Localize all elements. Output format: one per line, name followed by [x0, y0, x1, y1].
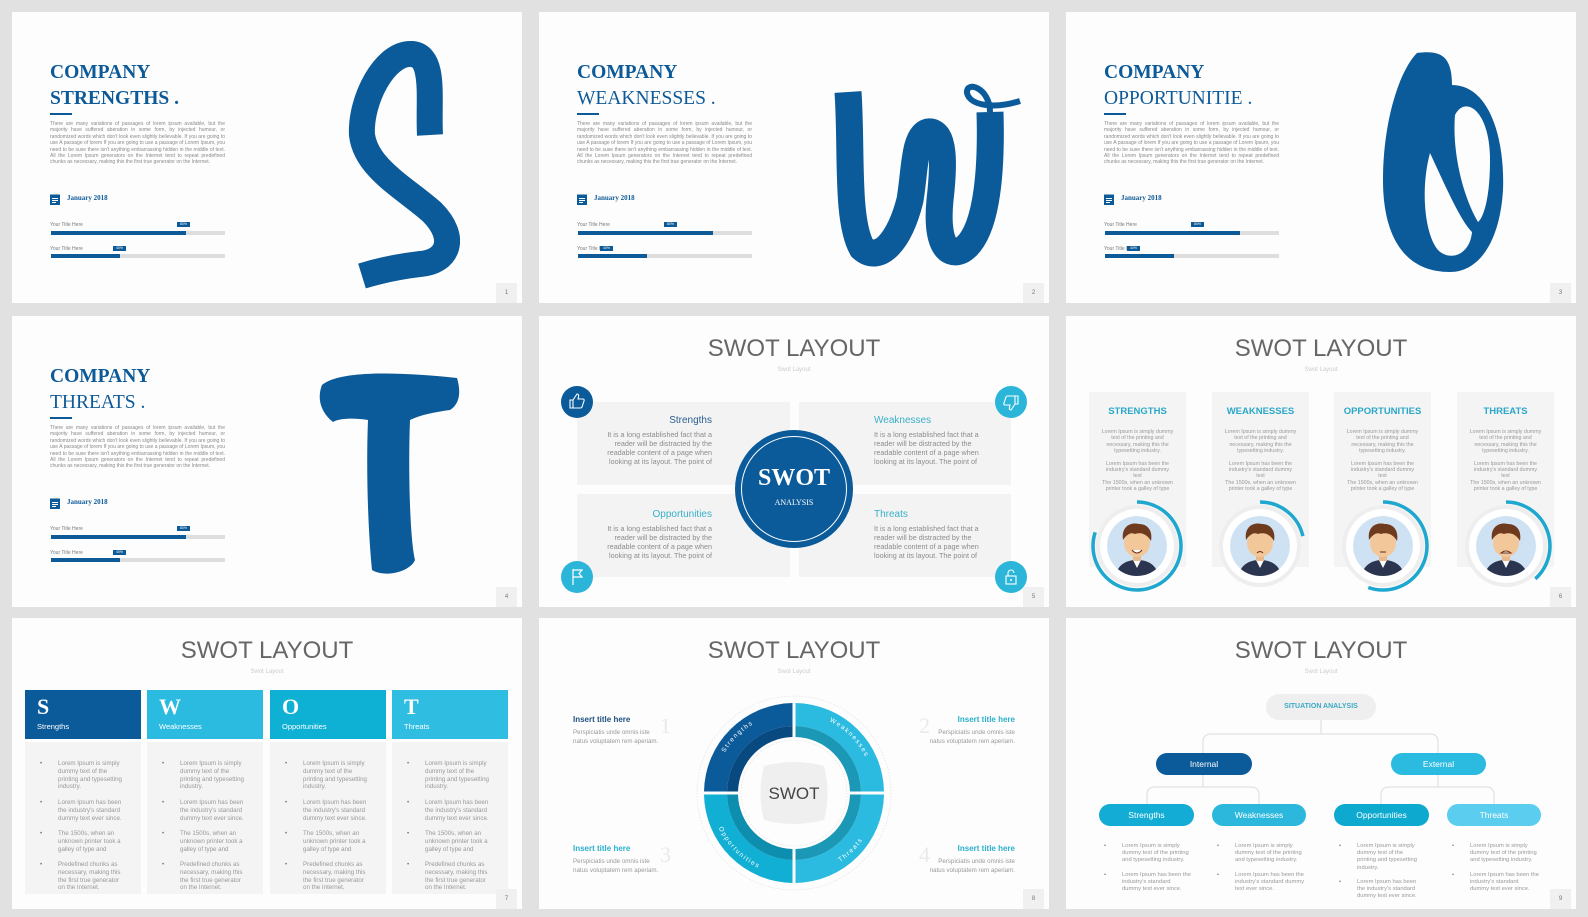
column: weaknesses: typesetting industry. [1237, 448, 1284, 454]
big letter O [1383, 52, 1504, 272]
progress bars: 80% [667, 222, 674, 226]
paragraph: There are many variations of passages of lorem ipsum available, but the majority have suffered aberation in some form, by injected humour, or randomized words which don't look even slightly believable. If you are going to use A passage of lorem If you are going to use a passage of Lorem Ipsum, you need to be suse there isn't anything embarrassing hidden in the middle of text. All the Lorem Ipsum generators on the Internet tend to repeat predefined chunks as necessary, making this the first true generator on the Internet. [50, 425, 225, 469]
slide 9: situation analysis tree: Lorem Ipsum has been the [1122, 872, 1191, 878]
title [50, 366, 150, 413]
node: weaknesses: Weaknesses [1235, 810, 1283, 820]
list: strengths: Predefined chunks as [58, 861, 118, 868]
node: strengths [1099, 804, 1194, 826]
progress bars: 80% [180, 222, 187, 226]
list: opportunities: The 1500s, when an [303, 830, 359, 837]
list: opportunities: Predefined chunks as [303, 861, 363, 868]
list: strengths: dummy text of the printing [1122, 850, 1189, 856]
heading: SWOT LAYOUT [1235, 335, 1407, 362]
panel: weaknesses: Weaknesses [874, 415, 931, 426]
node: situation analysis: SITUATION ANALYSIS [1284, 703, 1358, 710]
list: threats: and typesetting industry. [1470, 857, 1532, 863]
panel: strengths: reader will be distracted by the [615, 439, 712, 448]
ring chart: Opportunities [719, 826, 759, 868]
list: weaknesses [1235, 843, 1310, 865]
text block 3: natus voluptatem rem aperiam. [573, 866, 658, 874]
column: weaknesses: necessary, making this the [1229, 442, 1292, 448]
column: threats: The 1500s, when an unknown [1470, 480, 1541, 486]
progress bars: Your Title Here [50, 222, 83, 228]
panel: strengths: Strengths [669, 415, 712, 426]
slide 5: swot analysis quadrants [539, 316, 1049, 607]
column: opportunities: Lorem Ipsum has been the [1351, 461, 1414, 467]
slide 8: swot ring: 8 [1032, 896, 1035, 902]
list: threats: dummy text ever since. [425, 815, 489, 822]
progress bars: 40% [116, 246, 123, 250]
date: January 2018 [1121, 194, 1162, 202]
paragraph: There are many variations of passages of lorem ipsum available, but the majority have suffered aberation in some form, by injected humour, or randomized words which don't look even slightly believable. If you are going to use A passage of lorem If you are going to use a passage of Lorem Ipsum, you need to be suse there isn't anything embarrassing hidden in the middle of text. All the Lorem Ipsum generators on the Internet tend to repeat predefined chunks as necessary, making this the first true generator on the Internet. [50, 121, 225, 165]
list: strengths: the first true generator [58, 877, 119, 884]
panel: threats: looking at its layout. The point of [874, 551, 977, 560]
column: weaknesses: industry's standard dummy [1229, 467, 1292, 473]
slide 2: company weaknesses: 2 [1032, 290, 1035, 296]
column: threats: text of the printing and [1479, 435, 1532, 441]
list: strengths: Lorem Ipsum is simply [1122, 843, 1180, 849]
ring chart: Threats [838, 839, 862, 862]
column: threats: printer took a galley of type [1474, 486, 1537, 492]
paragraph: There are many variations of passages of lorem ipsum available, but the majority have suffered aberation in some form, by injected humour, or randomized words which don't look even slightly believable. If you are going to use A passage of lorem If you are going to use a passage of Lorem Ipsum, you need to be suse there isn't anything embarrassing hidden in the middle of text. All the Lorem Ipsum generators on the Internet tend to repeat predefined chunks as necessary, making this the first true generator on the Internet. [1104, 121, 1279, 165]
list: weaknesses: Lorem Ipsum is simply [180, 760, 242, 767]
date: January 2018 [594, 194, 635, 202]
slide 9: situation analysis tree: industry's standard [1122, 879, 1170, 885]
list: opportunities: the first true generator [303, 877, 364, 884]
column: opportunities: industry's standard dummy [1351, 467, 1414, 473]
column: strengths: Lorem Ipsum has been the [1106, 461, 1169, 467]
column: opportunities: printer took a galley of type [1351, 486, 1414, 492]
column: weaknesses: printer took a galley of type [1229, 486, 1292, 492]
column: weaknesses: WEAKNESSES [1227, 406, 1294, 417]
progress bars: Your Title Here [577, 246, 610, 252]
center circle: SWOT analysis [735, 430, 853, 548]
title: COMPANY [50, 366, 150, 387]
slide 7: swot columns: 7 [505, 896, 508, 902]
slide 9: situation analysis tree: text ever since. [1235, 886, 1274, 892]
list: strengths: Lorem Ipsum is simply [58, 760, 120, 767]
list: opportunities: printing and typesetting [303, 776, 367, 783]
text block 2: natus voluptatem rem aperiam. [930, 738, 1015, 744]
header: O opportunities: O [282, 694, 299, 719]
list: threats: necessary, making this [425, 869, 487, 876]
title [577, 62, 716, 109]
column: weaknesses: text of the printing and [1234, 435, 1287, 441]
list: weaknesses: galley of type and [180, 846, 229, 853]
heading: SWOT LAYOUT [708, 637, 880, 664]
progress bars: Your Title Here [50, 246, 83, 252]
column: strengths: Lorem Ipsum is simply dummy [1102, 429, 1173, 435]
list: threats: Lorem Ipsum is simply [1470, 843, 1528, 849]
progress bars: Your Title Here [50, 550, 83, 556]
column: weaknesses: text [1256, 473, 1265, 479]
column: opportunities: necessary, making this the [1351, 442, 1414, 448]
panel: opportunities: readable content of a page when [607, 542, 712, 551]
progress bars [50, 526, 225, 562]
list: threats: Lorem Ipsum has been [425, 799, 488, 806]
list: opportunities: on the Internet. [303, 884, 345, 891]
date: January 2018 [67, 194, 108, 202]
node: internal [1156, 753, 1252, 775]
icon: calendar [1104, 194, 1114, 205]
progress bars: 40% [116, 550, 123, 554]
node: threats [1447, 804, 1541, 826]
progress bars: Your Title Here [1104, 222, 1137, 228]
column: threats: text [1501, 473, 1510, 479]
text block 2: 2 [919, 713, 930, 738]
slide 9: situation analysis tree [1066, 618, 1576, 909]
panel: opportunities: reader will be distracted by the [615, 533, 712, 542]
text block 2 [919, 713, 1015, 744]
column: strengths [1089, 392, 1186, 567]
progress bars [50, 222, 225, 258]
slide 9: situation analysis tree: Lorem Ipsum has been the [1235, 872, 1304, 878]
slide 5: swot analysis quadrants: Swot Layout [777, 367, 811, 373]
text block 3 [573, 842, 671, 874]
slide 8: swot ring [539, 618, 1049, 909]
list: weaknesses: industry. [180, 783, 203, 790]
node: internal: Internal [1190, 759, 1218, 769]
slide 2: company weaknesses [539, 12, 1049, 303]
list: opportunities: industry. [303, 783, 326, 790]
column: weaknesses: The 1500s, when an unknown [1225, 480, 1296, 486]
panel: strengths: readable content of a page when [607, 448, 712, 457]
text block 1 [573, 713, 671, 744]
list: threats: unknown printer took a [425, 838, 488, 845]
title: OPPORTUNITIE . [1104, 88, 1252, 109]
text block 2: Insert title here [958, 715, 1015, 724]
column: opportunities: OPPORTUNITIES [1344, 406, 1421, 417]
text block 3: Insert title here [573, 844, 630, 853]
panel: weaknesses: reader will be distracted by the [874, 439, 971, 448]
panel: opportunities: It is a long established fact that a [607, 524, 712, 533]
list: strengths: dummy text of the [58, 768, 107, 775]
column: threats: Lorem Ipsum is simply dummy [1470, 429, 1541, 435]
heading: SWOT LAYOUT [708, 335, 880, 362]
column: opportunities: The 1500s, when an unknown [1347, 480, 1418, 486]
slide 9: situation analysis tree: Lorem Ipsum has been [1357, 879, 1416, 885]
list: strengths: printing and typesetting [58, 776, 122, 783]
header: W weaknesses [147, 690, 263, 739]
big letter W [834, 84, 1021, 266]
progress bars: 80% [180, 526, 187, 530]
character circles with progress arcs [1091, 500, 1552, 592]
panel: strengths: It is a long established fact that a [607, 430, 712, 439]
progress bars [1104, 222, 1279, 258]
text block 1: Perspiciatis unde omnis iste [573, 729, 650, 736]
progress bars: Your Title Here [1104, 246, 1137, 252]
connectors [1146, 720, 1494, 804]
slide 9: situation analysis tree: Swot Layout [1304, 669, 1338, 675]
list: opportunities: Lorem Ipsum is simply [303, 760, 365, 767]
list: weaknesses: the industry's standard [180, 807, 242, 814]
list: opportunities: Lorem Ipsum has been [303, 799, 366, 806]
column: weaknesses [1212, 392, 1309, 567]
node: threats: Threats [1480, 810, 1508, 820]
panel: strengths: looking at its layout. The point of [609, 457, 712, 466]
list: threats [1470, 843, 1545, 865]
slide 7: swot columns: Swot Layout [250, 669, 284, 675]
slide 4: company threats: 4 [505, 594, 508, 600]
list: strengths: galley of type and [58, 846, 107, 853]
list: strengths: industry. [58, 783, 81, 790]
progress bars: Your Title Here [577, 222, 610, 228]
node: opportunities [1334, 804, 1429, 826]
list: strengths: dummy text ever since. [58, 815, 122, 822]
slide 9: situation analysis tree: dummy text ever since. [1122, 886, 1182, 892]
list: opportunities: unknown printer took a [303, 838, 366, 845]
progress bars: Your Title Here [50, 526, 83, 532]
header: S strengths: Strengths [37, 722, 69, 731]
node: weaknesses [1212, 804, 1306, 826]
column: weaknesses: Lorem Ipsum has been the [1229, 461, 1292, 467]
header: S strengths [25, 690, 141, 739]
icon: padlock [995, 561, 1027, 593]
column: opportunities: typesetting industry. [1359, 448, 1406, 454]
text block 1: 1 [660, 713, 671, 738]
column: weaknesses: Lorem Ipsum is simply dummy [1225, 429, 1296, 435]
node: external: External [1423, 759, 1454, 769]
panel: weaknesses: readable content of a page when [874, 448, 979, 457]
list: strengths: on the Internet. [58, 884, 100, 891]
header: O opportunities [270, 690, 386, 739]
list: opportunities: necessary, making this [303, 869, 365, 876]
title [50, 62, 179, 109]
slide 5: swot analysis quadrants: 5 [1032, 594, 1035, 600]
progress bars: 80% [1194, 222, 1201, 226]
ring chart: Weaknesses [830, 717, 868, 756]
column: strengths: The 1500s, when an unknown [1102, 480, 1173, 486]
column: threats: typesetting industry. [1482, 448, 1529, 454]
panel: threats: Threats [874, 509, 908, 520]
list: weaknesses: Predefined chunks as [180, 861, 240, 868]
node: strengths: Strengths [1128, 810, 1165, 820]
list: threats: industry. [425, 783, 448, 790]
slide 9: situation analysis tree: industry's standard dummy [1235, 879, 1304, 885]
text block 4: Perspiciatis unde omnis iste [938, 858, 1015, 865]
icon: thumbs up [561, 386, 593, 418]
list: weaknesses: and typesetting industry. [1235, 857, 1297, 863]
title: COMPANY [577, 62, 677, 83]
list: weaknesses [147, 742, 263, 894]
text block 1: Insert title here [573, 715, 630, 724]
list: strengths [1122, 843, 1197, 865]
list: weaknesses: Lorem Ipsum has been [180, 799, 243, 806]
list: opportunities [270, 742, 386, 894]
panel: threats: readable content of a page when [874, 542, 979, 551]
progress bars: 40% [1130, 246, 1137, 250]
progress bars: 40% [603, 246, 610, 250]
node: external [1391, 753, 1486, 775]
big letter S [348, 41, 460, 288]
ring chart: Strengths [722, 722, 752, 752]
list: strengths [25, 742, 141, 894]
list: threats: the industry's standard [425, 807, 487, 814]
icon: calendar [577, 194, 587, 205]
icon: thumbs down [995, 386, 1027, 418]
header: T threats: T [404, 694, 419, 719]
title [1104, 62, 1252, 109]
panel: weaknesses [799, 402, 1011, 485]
panel: threats: reader will be distracted by the [874, 533, 971, 542]
big letter T [320, 374, 460, 574]
date: January 2018 [67, 498, 108, 506]
title: COMPANY [50, 62, 150, 83]
title: WEAKNESSES . [577, 88, 716, 109]
slide 9: situation analysis tree: Lorem Ipsum has been the [1470, 872, 1539, 878]
column: strengths: typesetting industry. [1114, 448, 1161, 454]
ring chart [696, 696, 892, 890]
list: weaknesses: Lorem Ipsum is simply [1235, 843, 1293, 849]
panel: opportunities [577, 494, 790, 577]
list: threats: printing and typesetting [425, 776, 489, 783]
list: strengths: unknown printer took a [58, 838, 121, 845]
text block 3: 3 [660, 842, 671, 867]
list: opportunities: galley of type and [303, 846, 352, 853]
text block 4: natus voluptatem rem aperiam. [930, 866, 1015, 874]
list: threats: The 1500s, when an [425, 830, 481, 837]
icon: flag [561, 561, 593, 593]
slide 7: swot columns [12, 618, 522, 909]
header: S strengths: S [37, 694, 49, 719]
slide 6: swot with characters [1066, 316, 1576, 607]
title: COMPANY [1104, 62, 1204, 83]
panel: strengths [577, 402, 790, 485]
node: opportunities: Opportunities [1356, 810, 1407, 820]
slide 6: swot with characters: Swot Layout [1304, 367, 1338, 373]
header: T threats [392, 690, 508, 739]
list: weaknesses: dummy text of the [180, 768, 229, 775]
column: strengths: printer took a galley of type [1106, 486, 1169, 492]
column: threats [1457, 392, 1554, 567]
column: threats: industry's standard dummy [1474, 467, 1537, 473]
panel: threats [799, 494, 1011, 577]
list: threats: Lorem Ipsum is simply [425, 760, 487, 767]
panel: weaknesses: It is a long established fact that a [874, 430, 979, 439]
column: strengths: STRENGTHS [1108, 406, 1167, 417]
text block 4 [919, 842, 1015, 874]
list: threats: the first true generator [425, 877, 486, 884]
slide 9: situation analysis tree: dummy text ever since. [1470, 886, 1530, 892]
panel: opportunities: looking at its layout. The point of [609, 551, 712, 560]
list: strengths: Lorem Ipsum has been [58, 799, 121, 806]
slide 4: company threats [12, 316, 522, 607]
list: threats: on the Internet. [425, 884, 467, 891]
slide 9: situation analysis tree: industry's standard [1470, 879, 1518, 885]
slide 1: company strengths: 1 [505, 290, 508, 296]
list: opportunities: printing and typesetting [1357, 857, 1417, 863]
list: weaknesses: dummy text ever since. [180, 815, 244, 822]
list: opportunities [1357, 843, 1432, 872]
list: opportunities: dummy text ever since. [303, 815, 367, 822]
column: threats: Lorem Ipsum has been the [1474, 461, 1537, 467]
column: strengths: industry's standard dummy [1106, 467, 1169, 473]
list: opportunities: the industry's standard [303, 807, 365, 814]
slide 6: swot with characters: 6 [1559, 594, 1562, 600]
list: threats [392, 742, 508, 894]
list: weaknesses: dummy text of the printing [1235, 850, 1302, 856]
center circle: SWOT analysis: ANALYSIS [775, 498, 813, 507]
text block 1: natus voluptatem rem aperiam. [573, 738, 658, 744]
paragraph: There are many variations of passages of lorem ipsum available, but the majority have suffered aberation in some form, by injected humour, or randomized words which don't look even slightly believable. If you are going to use A passage of lorem If you are going to use a passage of Lorem Ipsum, you need to be suse there isn't anything embarrassing hidden in the middle of text. All the Lorem Ipsum generators on the Internet tend to repeat predefined chunks as necessary, making this the first true generator on the Internet. [577, 121, 752, 165]
column: opportunities: Lorem Ipsum is simply dummy [1347, 429, 1418, 435]
header: O opportunities: Opportunities [282, 722, 327, 731]
list: strengths: The 1500s, when an [58, 830, 114, 837]
slide 9: situation analysis tree: 9 [1559, 896, 1562, 902]
header: T threats: Threats [404, 722, 429, 731]
panel: opportunities: Opportunities [653, 509, 712, 520]
slide 9: situation analysis tree: the industry's standard [1357, 886, 1415, 892]
heading: SWOT LAYOUT [1235, 637, 1407, 664]
list: opportunities: Lorem Ipsum is simply [1357, 843, 1415, 849]
icon: calendar [50, 194, 60, 205]
list: weaknesses: unknown printer took a [180, 838, 243, 845]
column: threats: THREATS [1483, 406, 1528, 417]
slide 9: situation analysis tree: dummy text ever since. [1357, 893, 1417, 899]
list: threats: dummy text of the [425, 768, 474, 775]
list: threats: galley of type and [425, 846, 474, 853]
text block 4: Insert title here [958, 844, 1015, 853]
column: opportunities [1334, 392, 1431, 567]
slide 8: swot ring: Swot Layout [777, 669, 811, 675]
ring chart: SWOT [768, 784, 820, 803]
text block 2: Perspiciatis unde omnis iste [938, 729, 1015, 736]
progress bars [577, 222, 752, 258]
list: weaknesses: the first true generator [180, 877, 241, 884]
panel: weaknesses: looking at its layout. The point of [874, 457, 977, 466]
panel: threats: It is a long established fact that a [874, 524, 979, 533]
icon: calendar [50, 498, 60, 509]
list: threats: dummy text of the printing [1470, 850, 1537, 856]
slide 3: company opportunities: 3 [1559, 290, 1562, 296]
list: threats: Predefined chunks as [425, 861, 485, 868]
title: THREATS . [50, 392, 145, 413]
list: weaknesses: on the Internet. [180, 884, 222, 891]
column: strengths: text [1133, 473, 1142, 479]
list: weaknesses: The 1500s, when an [180, 830, 236, 837]
list: opportunities: industry. [1357, 865, 1378, 871]
list: opportunities: dummy text of the [1357, 850, 1403, 856]
center circle: SWOT analysis: SWOT [758, 465, 830, 491]
header: W weaknesses: W [159, 694, 181, 719]
list: strengths: and typesetting industry. [1122, 857, 1184, 863]
header: W weaknesses: Weaknesses [159, 722, 202, 731]
heading: SWOT LAYOUT [181, 637, 353, 664]
list: strengths: necessary, making this [58, 869, 120, 876]
slide 3: company opportunities [1066, 12, 1576, 303]
list: weaknesses: printing and typesetting [180, 776, 244, 783]
column: opportunities: text of the printing and [1356, 435, 1409, 441]
title: STRENGTHS . [50, 88, 179, 109]
column: strengths: necessary, making this the [1106, 442, 1169, 448]
slide 1: company strengths [12, 12, 522, 303]
list: strengths: the industry's standard [58, 807, 120, 814]
column: threats: necessary, making this the [1474, 442, 1537, 448]
node: situation analysis [1266, 694, 1376, 720]
list: opportunities: dummy text of the [303, 768, 352, 775]
text block 4: 4 [919, 842, 930, 867]
column: strengths: text of the printing and [1111, 435, 1164, 441]
column: opportunities: text [1378, 473, 1387, 479]
list: weaknesses: necessary, making this [180, 869, 242, 876]
text block 3: Perspiciatis unde omnis iste [573, 858, 650, 865]
